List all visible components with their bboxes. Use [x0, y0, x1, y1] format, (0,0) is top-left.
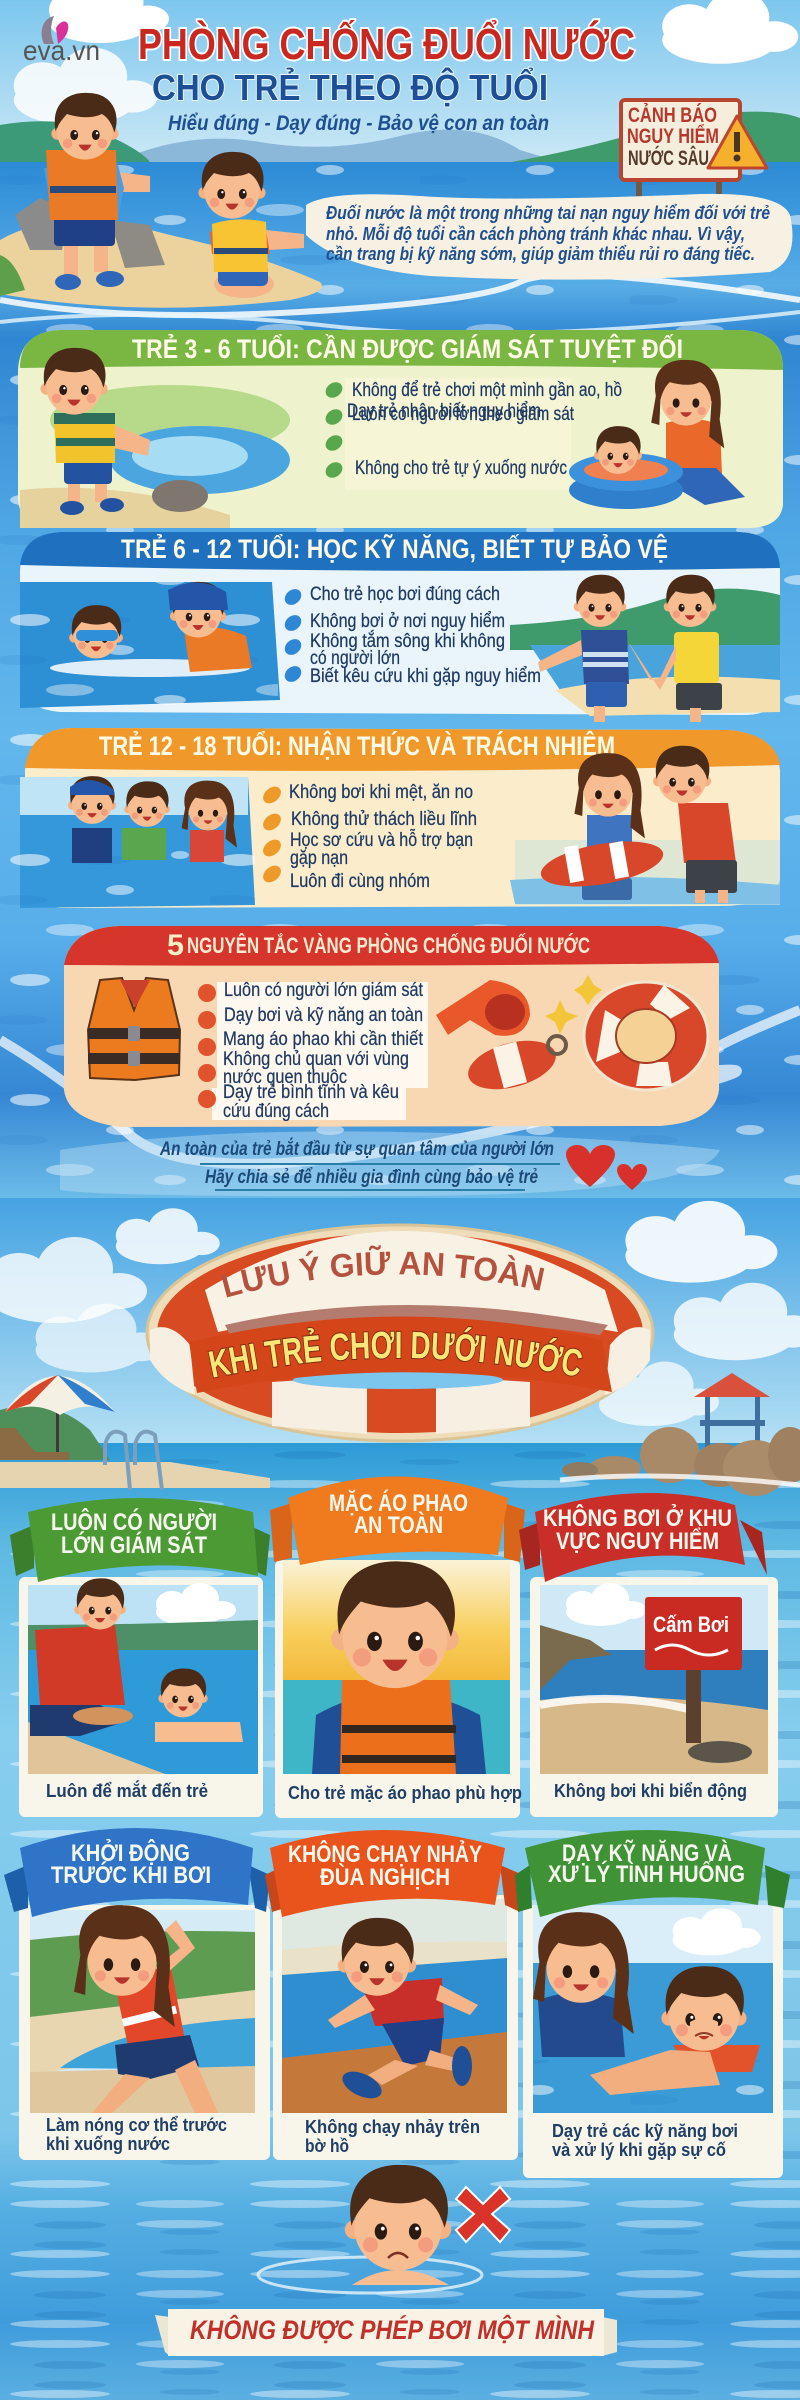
bullets and text: age 6-12: Biết kêu cứu khi gặp nguy hiểm	[310, 666, 541, 687]
badge text: top: LƯU Ý GIỮ AN TOÀN	[222, 1245, 544, 1298]
beach island	[0, 198, 322, 308]
icon: whistle	[436, 980, 530, 1036]
scene: no swimming sign on rocky beach: Cấm Bơi	[653, 1612, 729, 1637]
banner: adult supervision	[10, 1498, 270, 1582]
panel: five golden rules	[64, 926, 719, 1127]
banner: adult supervision: LỚN GIÁM SÁT	[61, 1531, 207, 1559]
banner: no running	[265, 1830, 523, 1917]
caption: Cho trẻ mặc áo phao phù hợp	[288, 1783, 522, 1803]
scene: adult and child by pool	[28, 1578, 258, 1774]
character: mother with child in pool	[569, 360, 745, 509]
banner: not allowed to swim alone	[155, 2309, 617, 2356]
banner: teach skills: XỬ LÝ TÌNH HUỐNG	[548, 1859, 745, 1888]
heading: age 6-12: TRẺ 6 - 12 TUỔI: HỌC KỸ NĂNG, BIẾT TỰ BẢO VỆ	[121, 532, 668, 564]
card: warm up: khi xuống nước	[46, 2134, 170, 2154]
banner: dangerous area: VỰC NGUY HIỂM	[556, 1527, 719, 1555]
bullets and text: age 12-18: Luôn đi cùng nhóm	[290, 871, 430, 892]
icon: hearts	[566, 1145, 647, 1190]
card: life jacket	[275, 1560, 522, 1818]
character: boy in orange life vest	[44, 93, 150, 290]
banner: adult supervision: LUÔN CÓ NGƯỜI	[51, 1508, 217, 1536]
banner: warm up: KHỞI ĐỘNG	[71, 1838, 190, 1867]
card: adult supervision	[19, 1577, 263, 1817]
scene: two boys on beach	[510, 575, 780, 722]
caption: Luôn để mắt đến trẻ	[46, 1780, 208, 1801]
panel: age 12-18	[20, 728, 780, 908]
bullets and text: age 6-12: Cho trẻ học bơi đúng cách	[310, 584, 500, 605]
subtitle: CHO TRẺ THEO ĐỘ TUỔI	[152, 65, 548, 108]
banner: no running: KHÔNG CHẠY NHẢY	[288, 1839, 482, 1868]
card: no running	[273, 1895, 518, 2160]
scene: three kids swimming	[20, 776, 255, 908]
scene: no swimming sign on rocky beach	[540, 1583, 768, 1774]
intro text panel	[306, 194, 792, 280]
text and bullets: five golden rules: cứu đúng cách	[223, 1101, 329, 1122]
heading: age 12-18: TRẺ 12 - 18 TUỔI: NHẬN THỨC VÀ TRÁCH NHIỆM	[99, 729, 615, 761]
warning sign: NƯỚC SÂU	[628, 146, 709, 170]
tagline: Hiểu đúng - Dạy đúng - Bảo vệ con an toàn	[168, 112, 549, 135]
banner: teach skills: DẠY KỸ NĂNG VÀ	[562, 1839, 732, 1867]
caption: Không chạy nhảy trên	[305, 2117, 480, 2137]
icon: life vest	[88, 978, 180, 1080]
closing message: An toàn của trẻ bắt đầu từ sự quan tâm của người lớn	[159, 1138, 554, 1160]
banner: not allowed to swim alone: KHÔNG ĐƯỢC PHÉP BƠI MỘT MÌNH	[190, 2314, 594, 2345]
closing message	[60, 1131, 720, 1196]
badge text: ribbon: KHI TRẺ CHƠI DƯỚI NƯỚC	[208, 1326, 583, 1379]
text and bullets: five golden rules: nước quen thuộc	[223, 1067, 347, 1088]
closing message: Hãy chia sẻ để nhiều gia đình cùng bảo vệ trẻ	[205, 1167, 538, 1188]
scene: girl stretching by pool	[30, 1905, 255, 2113]
scene: teens with rescue float	[510, 746, 780, 905]
banner: life jacket: MẶC ÁO PHAO	[329, 1489, 468, 1517]
card: teach skills: và xử lý khi gặp sự cố	[552, 2140, 726, 2160]
caption: Làm nóng cơ thể trước	[46, 2115, 227, 2135]
heading: five golden rules: NGUYÊN TẮC VÀNG PHÒNG CHỐNG ĐUỐI NƯỚC	[187, 932, 590, 958]
bullets and text: age 6-12: Không tắm sông khi không	[310, 630, 505, 652]
heading: five golden rules	[167, 929, 590, 962]
card: warm up	[19, 1905, 270, 2160]
character: small boy kneeling in yellow vest	[198, 152, 304, 298]
text and bullets: five golden rules: Luôn có người lớn giám sát	[224, 980, 424, 1001]
banner: dangerous area: KHÔNG BƠI Ở KHU	[543, 1503, 732, 1532]
banner: no running: ĐÙA NGHỊCH	[320, 1863, 450, 1891]
text backing and bullets: age 3-6: Không cho trẻ tự ý xuống nước	[355, 458, 567, 479]
bullets and text: age 6-12: Không bơi ở nơi nguy hiểm	[310, 611, 505, 632]
text backing and bullets: age 3-6: Dạy trẻ nhận biết nguy hiểm	[347, 401, 541, 422]
text backing and bullets: age 3-6: Luôn có người lớn theo giám sát	[352, 404, 575, 425]
text and bullets: five golden rules: Không chủ quan với vùng	[223, 1049, 409, 1070]
warning sign: CẢNH BÁO	[628, 104, 717, 127]
card: teach skills	[523, 1905, 783, 2178]
icon: stars	[545, 975, 602, 1034]
warning sign: NGUY HIỂM	[627, 125, 719, 148]
text and bullets: five golden rules	[198, 980, 428, 1122]
icon: life ring	[584, 982, 708, 1090]
text and bullets: five golden rules: Mang áo phao khi cần thiết	[223, 1029, 424, 1050]
card: dangerous area	[530, 1577, 778, 1817]
text and bullets: five golden rules: Dạy trẻ bình tĩnh và kêu	[223, 1082, 399, 1103]
text and bullets: five golden rules: Dạy bơi và kỹ năng an toàn	[224, 1005, 423, 1026]
bullets and text: age 12-18: Không thử thách liều lĩnh	[291, 809, 477, 830]
panel: age 3-6	[18, 330, 783, 528]
bullets and text: age 12-18: Không bơi khi mệt, ăn no	[289, 782, 473, 803]
caption: Dạy trẻ các kỹ năng bơi	[552, 2121, 738, 2141]
text backing and bullets: age 3-6: Không để trẻ chơi một mình gần ao, hồ	[352, 380, 622, 401]
logo: eva.vn	[23, 16, 100, 66]
banner: warm up: TRƯỚC KHI BƠI	[51, 1861, 211, 1889]
icon: rescue buoy	[463, 1032, 566, 1098]
card: no running: bờ hồ	[305, 2136, 349, 2156]
heading: age 3-6: TRẺ 3 - 6 TUỔI: CẦN ĐƯỢC GIÁM SÁT TUYỆT ĐỐI	[132, 332, 683, 364]
banner: warm up	[4, 1828, 270, 1917]
bullets and text: age 12-18	[260, 782, 477, 892]
banner: dangerous area	[519, 1493, 767, 1582]
panel: age 6-12	[20, 532, 780, 722]
banner: life jacket	[270, 1476, 525, 1565]
caption: Không bơi khi biển động	[554, 1781, 747, 1801]
scene: boy running near pool	[282, 1899, 507, 2113]
bullets and text: age 12-18: Học sơ cứu và hỗ trợ bạn	[290, 829, 473, 851]
bullets and text: age 6-12: có người lớn	[310, 648, 400, 669]
scene: pond with reeds	[20, 385, 290, 528]
bullets and text: age 6-12	[282, 584, 541, 687]
scene: pool deck with umbrella and ladder	[0, 1375, 270, 1490]
bullets and text: age 12-18: gặp nạn	[290, 848, 348, 869]
warning sign	[621, 100, 767, 197]
text backing and bullets: age 3-6	[323, 378, 622, 490]
banner: teach skills	[515, 1830, 790, 1917]
character: boy in striped vest	[40, 348, 150, 515]
icon: red X	[456, 2187, 510, 2242]
logo: eva.vn: eva.vn	[23, 35, 100, 66]
title: PHÒNG CHỐNG ĐUỔI NƯỚC	[138, 18, 635, 69]
scene: smiling boy in life jacket	[283, 1560, 510, 1774]
heading: five golden rules: 5	[167, 929, 184, 962]
section 1 background: sky and sea	[0, 0, 800, 1198]
scene: parent teaching child in water	[533, 1905, 773, 2113]
scene: swimmers in water	[20, 582, 280, 708]
character: sad boy alone in water	[258, 2165, 482, 2293]
section 2 background: sky and sea	[0, 1198, 800, 2400]
banner: life jacket: AN TOÀN	[354, 1511, 443, 1539]
life ring title badge	[146, 1224, 654, 1442]
scene: lifeguard tower and rocks	[560, 1373, 800, 1496]
